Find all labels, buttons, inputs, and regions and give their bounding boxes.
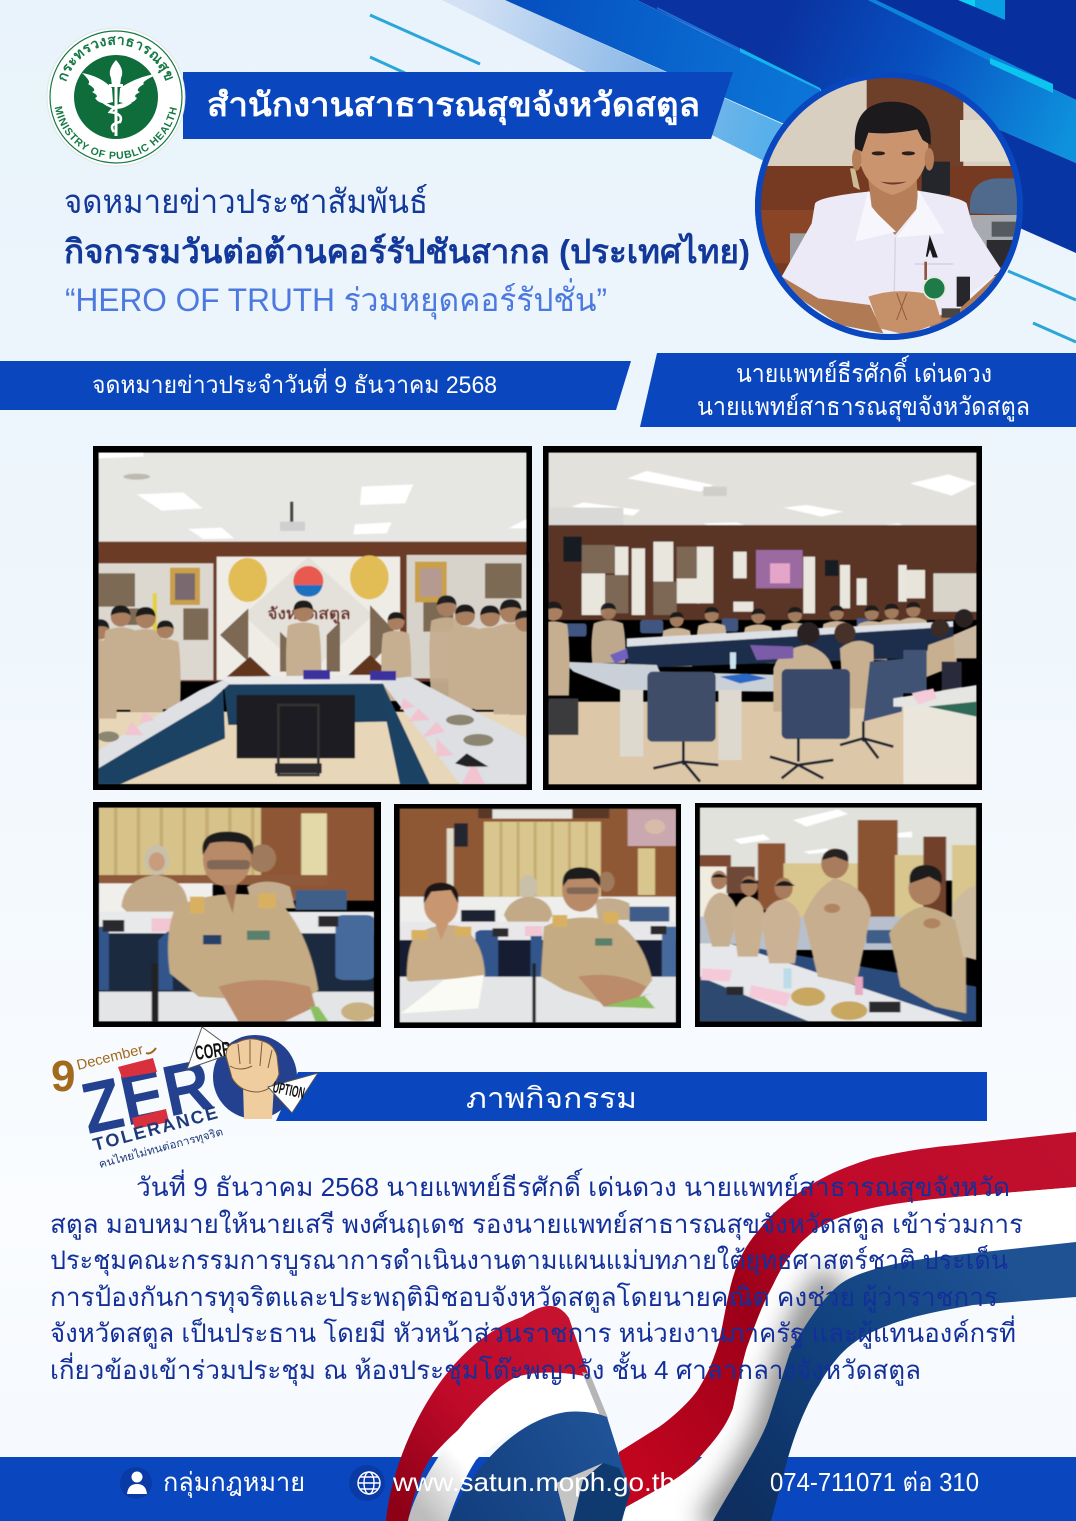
body paragraph xyxy=(50,1168,1023,1386)
logo: 9 December Zero Tolerance: UPTION xyxy=(271,1079,306,1103)
logo: 9 December Zero Tolerance: December xyxy=(75,1042,145,1074)
icon: Ministry of Public Health seal: MINISTRY OF PUBLIC HEALTH xyxy=(54,106,177,159)
logo: 9 December Zero Tolerance: CORR xyxy=(194,1038,233,1065)
footer: department name: กลุ่มกฎหมาย xyxy=(163,1467,305,1498)
logo: 9 December Zero Tolerance: 9 xyxy=(51,1052,75,1101)
body paragraph: เกี่ยวข้องเข้าร่วมประชุม ณ ห้องประชุมโต๊ะพญาวัง ชั้น 4 ศาลากลางจังหวัดสตูล xyxy=(50,1351,921,1386)
logo: 9 December Zero Tolerance xyxy=(51,1027,318,1171)
title: press release heading xyxy=(64,183,750,320)
icon: globe xyxy=(349,1465,385,1501)
name banner: provincial chief medical officer: นายแพทย์สาธารณสุขจังหวัดสตูล xyxy=(697,393,1030,422)
body paragraph: จังหวัดสตูล เป็นประธาน โดยมี หัวหน้าส่วนราชการ หน่วยงานภาครัฐ และผู้แทนองค์กรที่ xyxy=(50,1315,1016,1349)
photo 4: two officials seated at table xyxy=(394,804,681,1028)
icon: person xyxy=(120,1467,152,1499)
body paragraph: วันที่ 9 ธันวาคม 2568 นายแพทย์ธีรศักดิ์ เด่นดวง นายแพทย์สาธารณสุขจังหวัด xyxy=(136,1168,1010,1203)
body paragraph: ประชุมคณะกรรมการบูรณาการดำเนินงานตามแผนแม่บทภายใต้ยุทธศาสตร์ชาติ ประเด็น xyxy=(50,1244,1008,1276)
photo 3: seated official close-up xyxy=(93,802,381,1027)
name banner: provincial chief medical officer xyxy=(640,353,1076,427)
icon: Ministry of Public Health seal: กระทรวงสาธารณสุข xyxy=(59,36,174,82)
body paragraph: สตูล มอบหมายให้นายเสรี พงศ์นฤเดช รองนายแพทย์สาธารณสุขจังหวัดสตูล เข้าร่วมการ xyxy=(50,1209,1023,1240)
date banner: จดหมายข่าวประจำวันที่ 9 ธันวาคม 2568 xyxy=(92,368,497,399)
title: press release heading: “HERO OF TRUTH ร่วมหยุดคอร์รัปชั่น” xyxy=(65,278,607,320)
footer band xyxy=(0,1457,1076,1521)
ribbon left segment xyxy=(386,1306,630,1521)
icon: Ministry of Public Health seal xyxy=(46,28,186,166)
logo: 9 December Zero Tolerance: คนไทยไม่ทนต่อการทุจริต xyxy=(97,1125,224,1171)
footer: website: www.satun.moph.go.th xyxy=(392,1467,675,1497)
decorative diagonal bands top right xyxy=(370,0,1076,342)
header banner: office name xyxy=(183,72,733,139)
logo: 9 December Zero Tolerance: ZER xyxy=(75,1044,218,1150)
section heading banner: activity photos: ภาพกิจกรรม xyxy=(466,1083,637,1115)
portrait photo in circle xyxy=(753,72,1027,343)
ribbon right segment xyxy=(615,1132,1076,1521)
logo: 9 December Zero Tolerance: TOLERANCE xyxy=(91,1102,220,1155)
section heading banner: activity photos xyxy=(276,1072,987,1121)
title: press release heading: กิจกรรมวันต่อต้านคอร์รัปชันสากล (ประเทศไทย) xyxy=(64,232,750,270)
date banner xyxy=(0,361,631,410)
ribbon: Thai flag swoosh xyxy=(0,1132,1076,1521)
footer: phone number: 074-711071 ต่อ 310 xyxy=(770,1467,979,1497)
body paragraph: การป้องกันการทุจริตและประพฤติมิชอบจังหวัดสตูลโดยนายคณิต คงช่วย ผู้ว่าราชการ xyxy=(50,1282,998,1313)
name banner: provincial chief medical officer: นายแพทย์ธีรศักดิ์ เด่นดวง xyxy=(736,355,992,388)
header banner: office name: สำนักงานสาธารณสุขจังหวัดสตูล xyxy=(207,86,700,126)
title: press release heading: จดหมายข่าวประชาสัมพันธ์ xyxy=(64,183,428,220)
photo 1: standing meeting in conference room: จังหวัดสตูล xyxy=(267,605,351,625)
photo 1: standing meeting in conference room xyxy=(84,446,543,790)
photo 5: standing officials with hand on heart xyxy=(695,803,982,1027)
photo 2: seated conference room view xyxy=(538,446,982,790)
footer contact information xyxy=(120,1465,979,1501)
